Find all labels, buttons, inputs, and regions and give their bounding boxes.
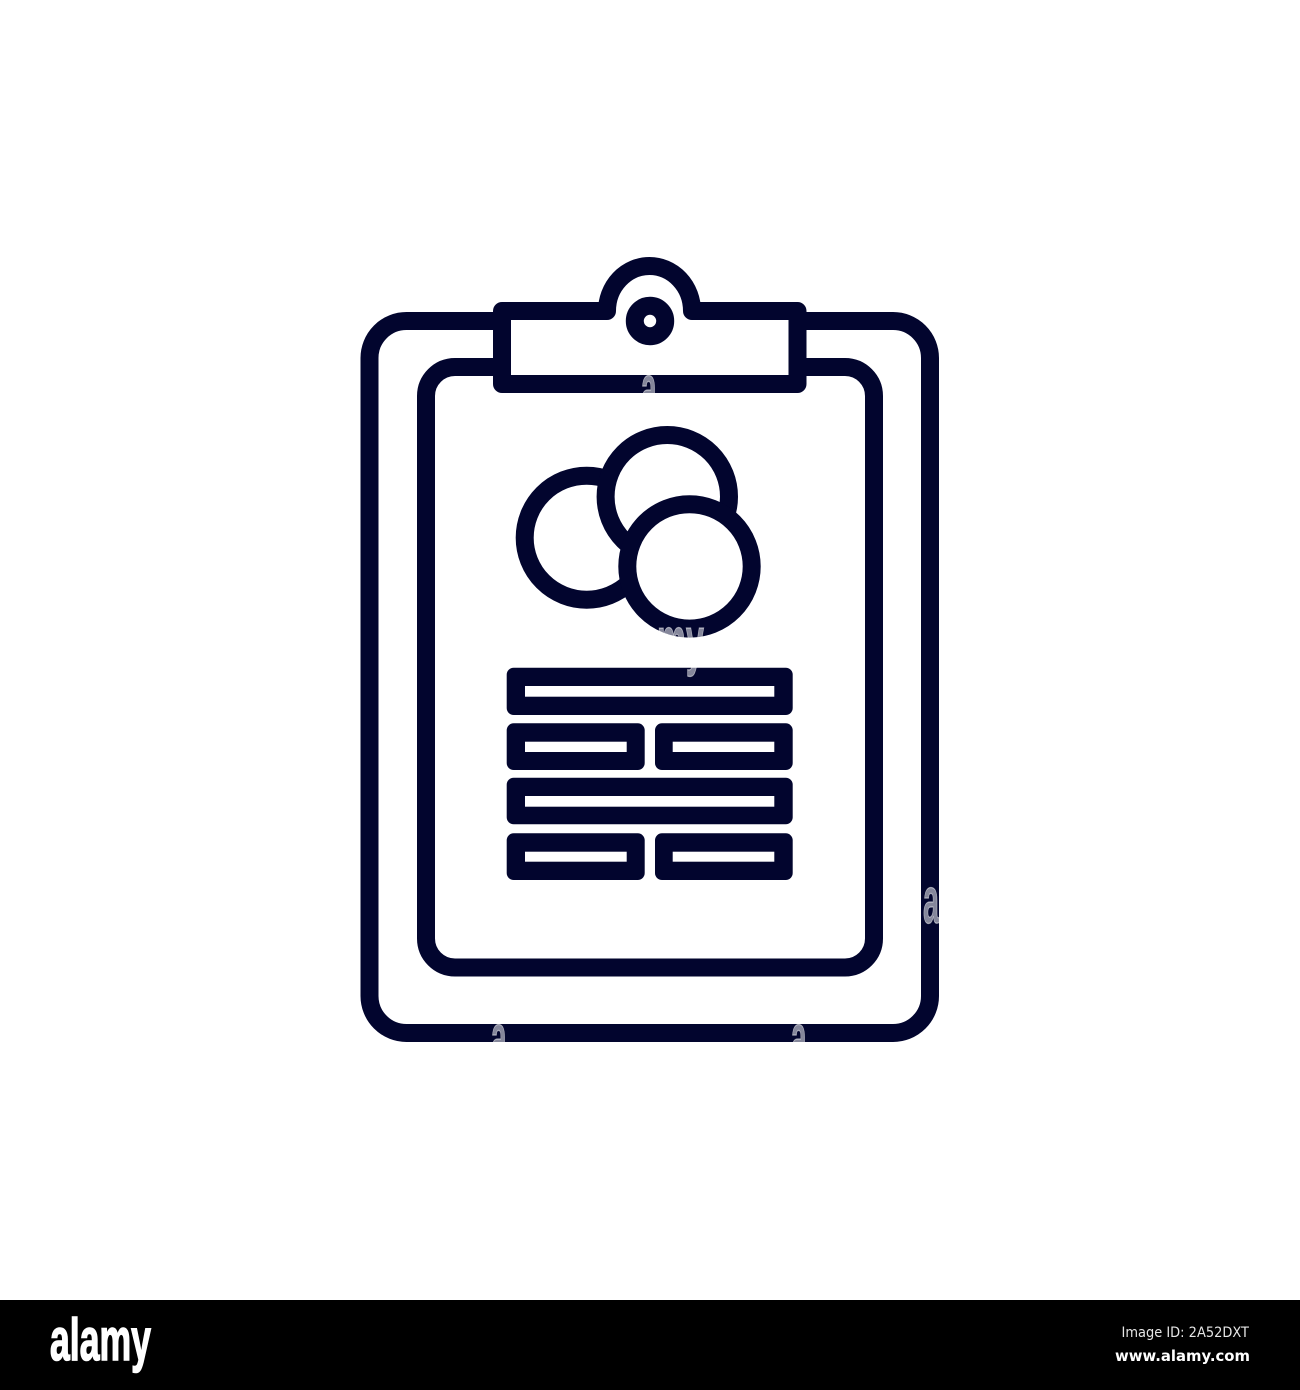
watermark fragments: my: [657, 603, 704, 677]
row 4: left bar: [507, 833, 645, 880]
clipboard outer board: [370, 321, 930, 1033]
clipboard inner paper: [426, 367, 874, 968]
top circle: [606, 435, 729, 558]
footer logo: alamy: [50, 1307, 151, 1373]
website: www.alamy.com: [1115, 1347, 1250, 1365]
row 3: full-width bar: [507, 778, 793, 824]
watermark fragments: [491, 351, 940, 1074]
clip body with arched top: [502, 266, 798, 384]
row 2: right bar: [655, 723, 793, 770]
chart: three overlapping circles: [525, 435, 752, 629]
icon: clipboard: [370, 266, 930, 1033]
infographic canvas: a: [923, 863, 940, 937]
left circle: [525, 476, 649, 600]
watermark fragments: a: [641, 351, 657, 425]
watermark fragments: a: [491, 1000, 507, 1074]
row 4: right bar: [655, 833, 793, 880]
row 1: full-width bar: [507, 668, 793, 715]
watermark fragments: a: [791, 1000, 807, 1074]
image id: Image ID: 2A52DXT: [1122, 1325, 1249, 1341]
row 2: left bar: [507, 723, 645, 770]
text lines table: [507, 668, 793, 880]
footer bar: [0, 1300, 1300, 1390]
clip hole: [635, 306, 665, 336]
front circle: [627, 504, 752, 629]
